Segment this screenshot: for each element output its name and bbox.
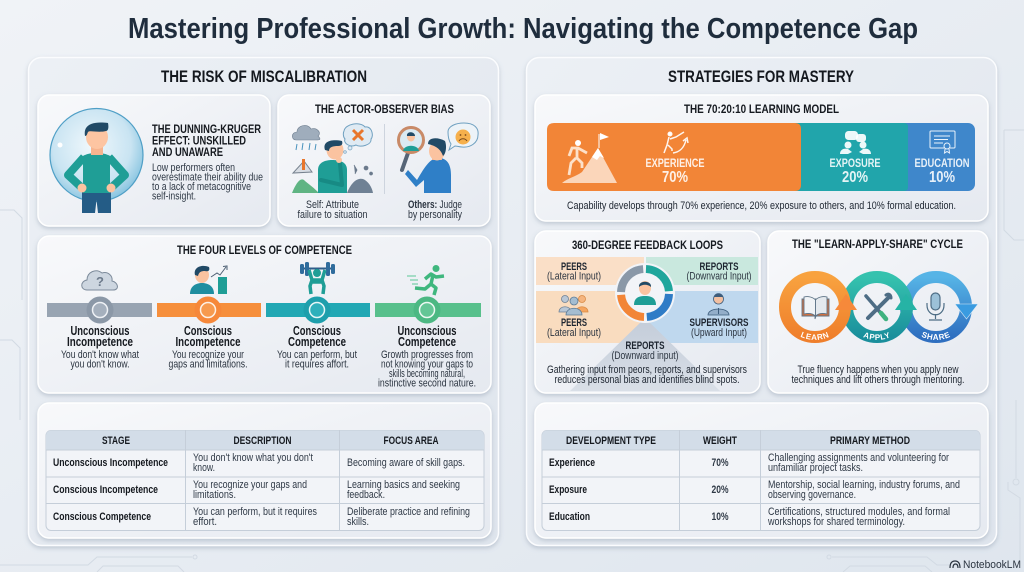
table: stage, description, focus area: [46, 430, 484, 530]
sector: supervisors: (Upward Input): [691, 327, 747, 339]
heading: Dunning-Kruger: [152, 122, 261, 159]
table: stage, description, focus area: Learning basics and seeking: [347, 479, 460, 491]
caption: 360 feedback: [547, 364, 747, 386]
card: the four levels of competence: [38, 236, 491, 393]
table: development type, weight, primary method: 70%: [712, 457, 729, 469]
heading: actor-observer bias: THE ACTOR-OBSERVER BIAS: [315, 102, 454, 116]
heading: learn-apply-share: THE "LEARN-APPLY-SHARE" CYCLE: [792, 237, 963, 251]
icon: wrench and screwdriver: [866, 294, 891, 319]
table: development type, weight, primary method: PRIMARY METHOD: [830, 435, 910, 447]
caption: self: [298, 199, 368, 221]
icon: group of people: [559, 296, 588, 315]
card: learn-apply-share cycle: [766, 230, 990, 398]
segment: education 10%: EDUCATION: [914, 158, 970, 170]
level 4 text: skills becoming natural,: [389, 368, 465, 380]
table: development type, weight, primary method: unfamiliar project tasks.: [768, 462, 863, 474]
level 2 text: gaps and limitations.: [168, 358, 248, 370]
level 1 text: Incompetence: [67, 335, 133, 349]
table: stage, description, focus area: know.: [193, 462, 215, 474]
table: development type, weight, primary method: Education: [549, 511, 590, 523]
text: Dunning-Kruger description: self-insight.: [152, 190, 196, 202]
caption: self: failure to situation: [298, 209, 368, 221]
card: 70:20:10 learning model: [535, 95, 988, 221]
cycle: share ring: SHARE: [922, 332, 950, 340]
heading: 360 feedback: 360-DEGREE FEEDBACK LOOPS: [572, 238, 723, 252]
text: Dunning-Kruger description: to a lack of metacognitive: [152, 181, 251, 193]
heading: four levels: THE FOUR LEVELS OF COMPETENCE: [177, 243, 352, 257]
icon: climber on a mountain with flag: [562, 133, 617, 183]
table: development type, weight, primary method: Mentorship, social learning, industry forums, and: [768, 479, 960, 491]
level 2 text: [168, 324, 248, 370]
sector: supervisors: SUPERVISORS: [690, 317, 748, 329]
table: stage, description, focus area: You don't know what you don't: [193, 452, 313, 464]
table: stage, description, focus area: skills.: [347, 516, 369, 528]
icon: self attribution scene: [292, 124, 373, 193]
icon: runner: [407, 265, 444, 295]
text: Dunning-Kruger description: Low performers often: [152, 162, 235, 174]
level 4 text: not knowing your gaps to: [381, 358, 473, 370]
level 2 text: Conscious: [184, 324, 232, 338]
level 4 text: [378, 324, 476, 390]
table: stage, description, focus area: Conscious Incompetence: [53, 484, 158, 496]
card: Dunning-Kruger effect: [38, 95, 270, 226]
icon: cloud with question mark: ?: [96, 274, 104, 289]
heading: strategies for mastery: STRATEGIES FOR MASTERY: [668, 68, 854, 86]
icon: ascending figure: [664, 132, 688, 153]
title: Mastering Professional Growth: Navigating the Competence Gap: [128, 13, 918, 45]
level 3 text: it requires affort.: [285, 358, 349, 370]
caption: 360 feedback: Gathering input from peors, reports, and supervisors: [547, 364, 747, 376]
table: stage, description, focus area: limitations.: [193, 489, 236, 501]
table: stage, description, focus area: Unconscious Incompetence: [53, 457, 168, 469]
table: development type, weight, primary method: Certifications, structured modules, and formal: [768, 506, 950, 518]
caption: others: by personality: [408, 209, 462, 221]
sector: reports bottom: [570, 318, 720, 391]
level 1 text: [61, 324, 139, 370]
level 2 text: You recognize your: [172, 349, 244, 361]
segment: exposure 20%: [790, 123, 908, 191]
sector: peers lower: PEERS: [561, 317, 587, 329]
icon: observer with magnifier: [398, 123, 478, 193]
icon: person and growth chart: [190, 266, 227, 294]
table: development type, weight, primary method: WEIGHT: [703, 435, 737, 447]
table: development type, weight, primary method: Challenging assignments and volunteering for: [768, 452, 949, 464]
icon: certificate: [930, 131, 955, 153]
sector: reports top: (Downvard Input): [686, 270, 752, 282]
table: stage, description, focus area: FOCUS AREA: [384, 435, 439, 447]
table: development type, weight, primary method: [542, 430, 980, 530]
table: stage, description, focus area: Conscious Competence: [53, 511, 151, 523]
table: stage, description, focus area: feedback.: [347, 489, 385, 501]
level 1 text: you don't know.: [70, 358, 130, 370]
caption: learn-apply-share: [792, 364, 964, 386]
cycle: learn ring: LEARN: [800, 332, 829, 340]
level 1 text: You don't know what: [61, 349, 139, 361]
level 3 text: [277, 324, 357, 370]
table: development type, weight, primary method: Experience: [549, 457, 595, 469]
caption: others: Others: Judge: [408, 199, 462, 211]
card: development types table: [535, 403, 988, 538]
icon: person in a bubble: [50, 108, 143, 213]
sector: supervisors: [646, 291, 758, 343]
card: 360-degree feedback loops: [535, 231, 760, 393]
heading: the risk of miscalibration: THE RISK OF MISCALIBRATION: [161, 68, 367, 86]
sector: peers top: PEERS: [561, 261, 587, 273]
table: development type, weight, primary method: 20%: [712, 484, 729, 496]
sector: peers top: (Lateral Input): [547, 270, 601, 282]
timeline: stage 1 marker: [47, 296, 152, 324]
text: Dunning-Kruger description: [152, 162, 263, 202]
icon: microphone: [927, 293, 944, 320]
table: stage, description, focus area: STAGE: [102, 435, 130, 447]
table: development type, weight, primary method: Exposure: [549, 484, 587, 496]
icon: supervisor: [708, 293, 729, 315]
timeline: stage 3 marker: [266, 296, 370, 324]
sector: peers top: [536, 257, 644, 285]
cycle: apply ring: APPLY: [863, 332, 888, 340]
sector: reports bottom: (Downward input): [612, 350, 678, 362]
level 1 text: Unconscious: [70, 324, 130, 338]
caption: learn-apply-share: techniques and lift others through mentoring.: [792, 374, 964, 386]
level 4 text: Growth progresses from: [381, 349, 473, 361]
divider: [384, 124, 386, 194]
level 4 text: Competence: [398, 335, 456, 349]
table: stage, description, focus area: Deliberate practice and refining: [347, 506, 470, 518]
table: stage, description, focus area: effort.: [193, 516, 217, 528]
icon: cloud with question mark: [82, 271, 117, 290]
caption: 360 feedback: reduces personal bias and identifies blind spots.: [554, 374, 740, 386]
level 3 text: You can perform, but: [277, 349, 357, 361]
caption: learn-apply-share: True fluency happens when you apply new: [798, 364, 959, 376]
level 2 text: Incompetence: [176, 335, 241, 349]
heading: 70:20:10: THE 70:20:10 LEARNING MODEL: [684, 102, 839, 116]
segment: experience 70%: [547, 123, 801, 191]
text: Dunning-Kruger description: overestimate their ability due: [152, 172, 263, 184]
sector: reports top: [646, 257, 758, 285]
table: stage, description, focus area: DESCRIPTION: [234, 435, 292, 447]
cycle: share ring: [900, 271, 978, 343]
segment: experience 70%: EXPERIENCE: [646, 158, 705, 170]
timeline: stage 4 marker: [375, 296, 481, 324]
sector: peers lower: (Lateral Input): [547, 327, 601, 339]
icon: open book: [802, 297, 829, 319]
NotebookLM logo: NotebookLM: [963, 559, 1021, 571]
sector: reports top: REPORTS: [700, 261, 738, 273]
panel: the risk of miscalibration: [28, 58, 498, 546]
level 4 text: instinctive second nature.: [378, 378, 476, 390]
table: development type, weight, primary method: DEVELOPMENT TYPE: [566, 435, 656, 447]
heading: Dunning-Kruger: AND UNAWARE: [152, 145, 223, 159]
cycle: apply ring: [846, 271, 917, 343]
table: stage, description, focus area: Becoming aware of skill gaps.: [347, 457, 465, 469]
segment: education 10%: 10%: [929, 169, 955, 186]
level 4 text: Unconscious: [398, 324, 457, 338]
table: stage, description, focus area: You can perform, but it requires: [193, 506, 317, 518]
timeline: stage 2 marker: [157, 296, 261, 324]
icon: feedback ring with person: [615, 263, 675, 323]
table: development type, weight, primary method: observing governance.: [768, 489, 856, 501]
table: stage, description, focus area: You recognize your gaps and: [193, 479, 307, 491]
segment: exposure 20%: 20%: [842, 169, 868, 186]
sector: reports bottom: REPORTS: [626, 340, 664, 352]
level 3 text: Conscious: [293, 324, 341, 338]
panel: strategies for mastery: [524, 57, 999, 550]
table: development type, weight, primary method: 10%: [712, 511, 729, 523]
segment: experience 70%: 70%: [662, 169, 688, 186]
heading: Dunning-Kruger: EFFECT: UNSKILLED: [152, 134, 246, 148]
segment: education 10%: [890, 123, 975, 191]
level 3 text: Competence: [288, 335, 346, 349]
cycle: learn ring: [779, 271, 857, 343]
caption: self: Self: Attribute: [306, 199, 359, 211]
icon: weightlifter: [300, 262, 335, 294]
icon: people talking: [840, 131, 871, 154]
heading: Dunning-Kruger: THE DUNNING-KRUGER: [152, 122, 261, 136]
table: development type, weight, primary method: workshops for shared terminology.: [767, 516, 905, 528]
sector: peers lower: [536, 291, 644, 343]
segment: exposure 20%: EXPOSURE: [830, 158, 881, 170]
card: stages table: [38, 403, 491, 538]
card: actor-observer bias: [278, 95, 490, 226]
caption: others: [408, 199, 462, 221]
